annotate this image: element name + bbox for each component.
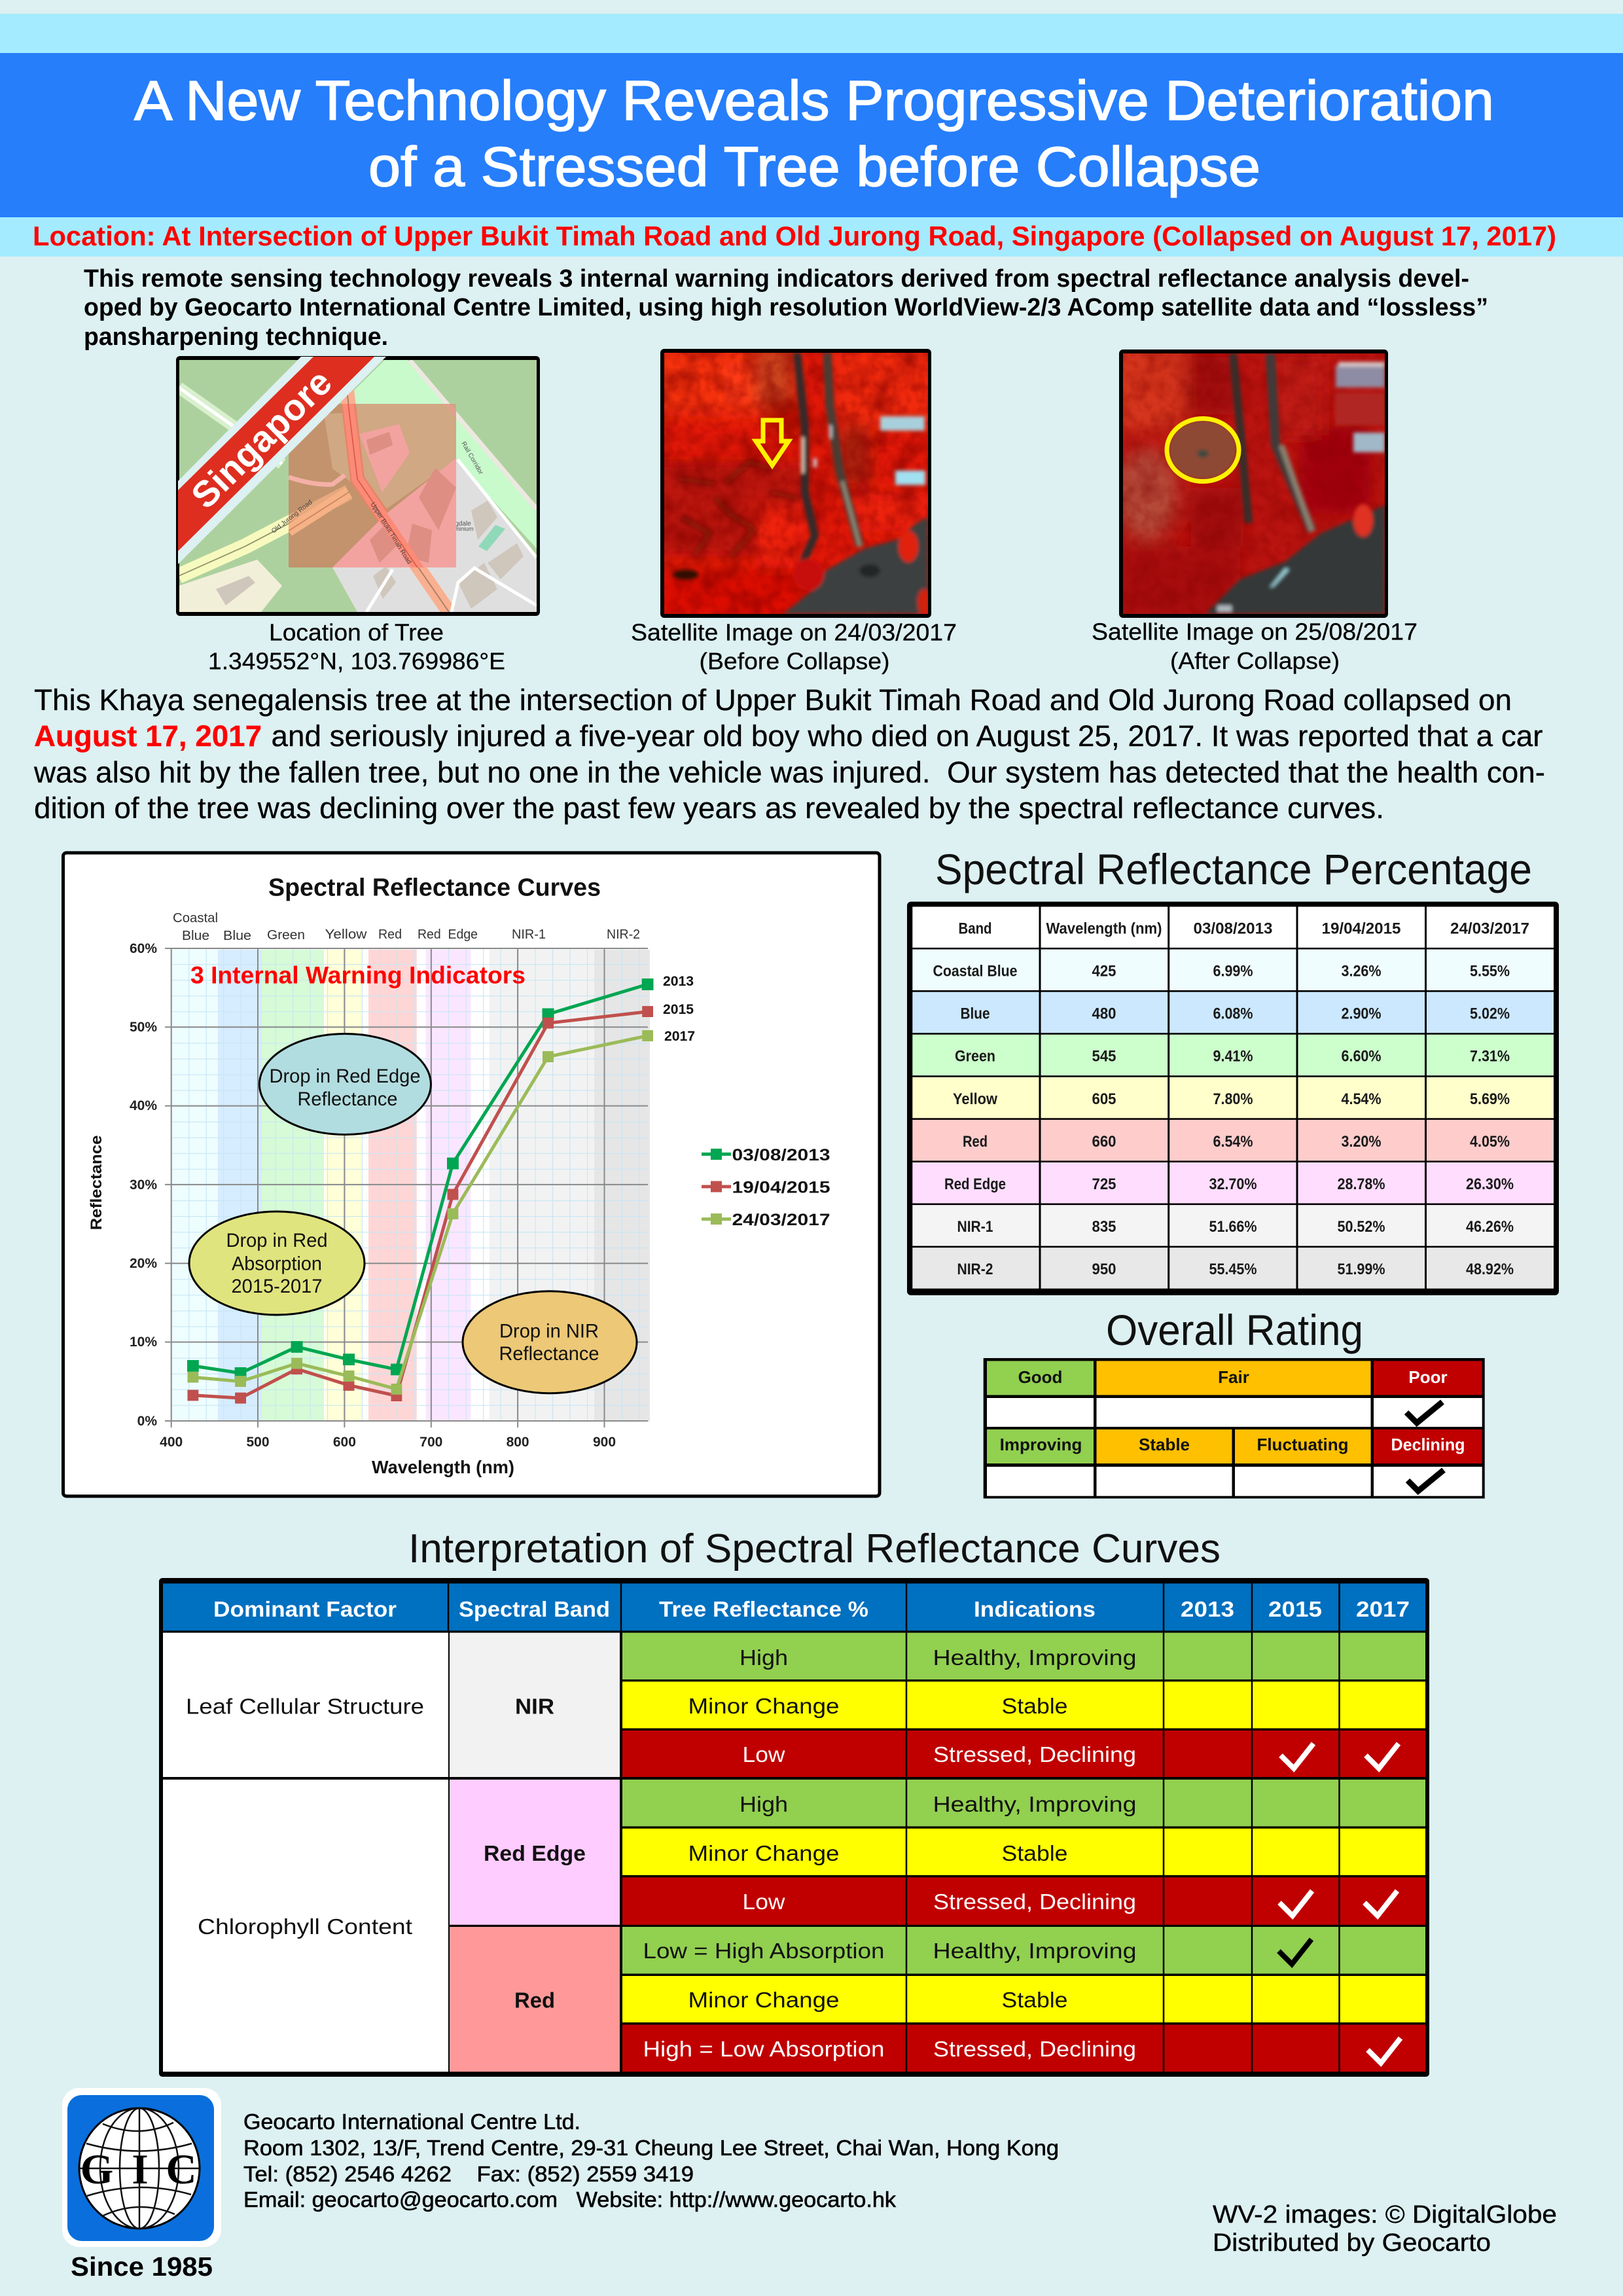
- icon: check declining: [1408, 1470, 1444, 1491]
- callout: red absorption: Drop in Red: [226, 1230, 327, 1251]
- panel: spectral reflectance chart: [63, 853, 880, 1496]
- x axis labels: 500: [246, 1435, 270, 1450]
- table: spectral reflectance percentage: 51.99%: [1338, 1261, 1385, 1278]
- rating rows: Minor Change: [688, 1988, 839, 2012]
- caption before: Satellite Image on 24/03/2017: [631, 619, 957, 645]
- table header row: Dominant Factor: [213, 1597, 397, 1621]
- band labels: Blue: [223, 929, 251, 943]
- band labels: Blue: [182, 929, 209, 943]
- year labels: 2015: [663, 1002, 694, 1017]
- band labels: Green: [267, 928, 305, 942]
- map caption: [208, 619, 505, 674]
- spectral band backgrounds: [171, 950, 650, 1422]
- panel: satellite image before collapse: [654, 347, 933, 620]
- intro text block: pansharpening technique.: [84, 323, 388, 351]
- table: spectral reflectance percentage: 545: [1092, 1048, 1116, 1066]
- table: spectral reflectance percentage: 55.45%: [1209, 1261, 1257, 1278]
- table: spectral reflectance percentage: 7.80%: [1213, 1090, 1253, 1108]
- rating rows: Healthy, Improving: [933, 1939, 1136, 1963]
- legend: 19/04/2015: [732, 1179, 830, 1197]
- y axis labels: [130, 941, 157, 1429]
- x axis title: Wavelength (nm): [372, 1457, 514, 1477]
- table: spectral reflectance percentage: 835: [1092, 1218, 1116, 1236]
- panel: location map: Rail Corridor: [459, 440, 484, 476]
- map caption: 1.349552°N, 103.769986°E: [208, 648, 505, 674]
- rating rows: Stressed, Declining: [933, 2037, 1136, 2061]
- logo: GIC globe: G: [80, 2146, 113, 2193]
- band labels: Red: [378, 927, 402, 942]
- panel: location map: Old Jurong Road: [270, 499, 313, 535]
- panel: location map: Upper Bukit Timah Road: [368, 501, 413, 565]
- table: spectral reflectance percentage: Coastal Blue: [933, 962, 1017, 980]
- contact details: Geocarto International Centre Ltd.: [243, 2109, 580, 2134]
- x axis labels: 800: [507, 1435, 529, 1450]
- table: spectral reflectance percentage: 660: [1092, 1133, 1116, 1151]
- table header row: [163, 1583, 1425, 1631]
- table: spectral reflectance percentage: Red: [963, 1133, 988, 1151]
- x axis labels: 900: [593, 1435, 616, 1450]
- body paragraph: was also hit by the fallen tree, but no one in the vehicle was injured. Our system has detected that the health con-: [33, 755, 1545, 789]
- image credit: [1213, 2201, 1557, 2257]
- panel: location map: Condominium: [437, 526, 474, 532]
- table: spectral reflectance percentage: Blue: [961, 1005, 990, 1023]
- title: [134, 70, 1494, 198]
- contact details: Room 1302, 13/F, Trend Centre, 29-31 Cheung Lee Street, Chai Wan, Hong Kong: [243, 2136, 1059, 2160]
- table: spectral reflectance percentage: 4.05%: [1470, 1133, 1510, 1151]
- table: spectral reflectance percentage: 480: [1092, 1005, 1116, 1023]
- rating rows: Healthy, Improving: [933, 1645, 1136, 1670]
- table: spectral reflectance percentage: 4.54%: [1342, 1090, 1381, 1108]
- dominant factor and band cells: Red: [514, 1988, 555, 2013]
- location line: Location: At Intersection of Upper Bukit Timah Road and Old Jurong Road, Singapore (Collapsed on August 17, 2017): [33, 221, 1556, 251]
- callout: NIR: Reflectance: [499, 1343, 599, 1365]
- table: spectral reflectance percentage: 6.99%: [1213, 962, 1253, 980]
- rating rows: Low: [742, 1890, 785, 1914]
- dominant factor and band cells: Leaf Cellular Structure: [186, 1695, 424, 1719]
- image credit: WV-2 images: © DigitalGlobe: [1213, 2201, 1557, 2229]
- y axis labels: 60%: [130, 941, 157, 956]
- banner: Singapore: Singapore: [183, 361, 340, 516]
- table: overall rating: Stable: [1139, 1435, 1190, 1454]
- table: spectral reflectance percentage: 24/03/2017: [1450, 920, 1529, 937]
- callout: NIR: Drop in NIR: [499, 1321, 599, 1342]
- rating rows: High: [740, 1792, 788, 1816]
- y axis labels: 50%: [130, 1020, 157, 1035]
- table header row: 2017: [1356, 1597, 1410, 1621]
- band labels: NIR-1: [512, 927, 546, 942]
- callout: red edge: Reflectance: [297, 1088, 398, 1110]
- rating rows: High = Low Absorption: [643, 2037, 885, 2061]
- table: spectral reflectance percentage: 2.90%: [1342, 1005, 1381, 1023]
- table: spectral reflectance percentage: 5.55%: [1470, 962, 1510, 980]
- overlay: study area square: [289, 404, 456, 567]
- rating rows: Low: [742, 1742, 785, 1767]
- logo: GIC globe: I: [132, 2146, 149, 2193]
- year labels: [663, 974, 695, 1044]
- table: spectral reflectance percentage: 5.69%: [1470, 1090, 1510, 1108]
- table: overall rating: Poor: [1408, 1367, 1448, 1387]
- table: spectral reflectance percentage: 6.54%: [1213, 1133, 1253, 1151]
- heading: overall rating: Overall Rating: [1106, 1306, 1363, 1354]
- y axis labels: 30%: [130, 1177, 157, 1193]
- x axis labels: [160, 1435, 616, 1450]
- heading: spectral reflectance percentage: Spectral Reflectance Percentage: [935, 845, 1532, 893]
- band labels: NIR-2: [607, 927, 640, 942]
- legend: 03/08/2013: [732, 1146, 830, 1164]
- table: spectral reflectance percentage: 51.66%: [1209, 1218, 1257, 1236]
- dominant factor and band cells: Chlorophyll Content: [198, 1914, 412, 1939]
- table: overall rating: Fluctuating: [1257, 1435, 1349, 1454]
- logo: GIC globe: [62, 2088, 221, 2247]
- y axis labels: 10%: [130, 1335, 157, 1350]
- rating rows: Stressed, Declining: [933, 1890, 1136, 1914]
- table: spectral reflectance percentage: 6.08%: [1213, 1005, 1253, 1023]
- banner: Singapore: [178, 357, 386, 564]
- band labels: Yellow: [325, 927, 367, 942]
- contact details: Tel: (852) 2546 4262 Fax: (852) 2559 3419: [243, 2162, 694, 2186]
- panel: satellite image after collapse: [1113, 347, 1388, 619]
- rating rows: Low = High Absorption: [643, 1939, 885, 1963]
- y axis title: Reflectance: [88, 1135, 105, 1230]
- x axis labels: 400: [160, 1435, 183, 1450]
- table: overall rating: Improving: [1000, 1435, 1082, 1454]
- table: spectral reflectance percentage: 19/04/2015: [1322, 920, 1400, 937]
- body paragraph: This Khaya senegalensis tree at the intersection of Upper Bukit Timah Road and Old Jurong Road collapsed on: [34, 683, 1512, 717]
- table: spectral reflectance percentage: 6.60%: [1342, 1048, 1381, 1066]
- table: overall rating: [984, 1358, 1485, 1499]
- chart title: Spectral Reflectance Curves: [268, 874, 601, 902]
- band labels: Coastal: [173, 911, 218, 925]
- table: spectral reflectance percentage: 425: [1092, 962, 1116, 980]
- series: 2017: [193, 1035, 648, 1389]
- table: spectral reflectance percentage: 03/08/2013: [1194, 920, 1272, 937]
- caption before: [631, 619, 957, 674]
- table header row: 2013: [1181, 1597, 1234, 1621]
- year labels: 2013: [663, 974, 694, 989]
- icon: yellow circle: [1167, 419, 1239, 482]
- panel: location map: Springdale: [440, 520, 471, 528]
- body paragraph: and seriously injured a five-year old boy who died on August 25, 2017. It was reported that a car: [271, 719, 1543, 753]
- series: 2015: [193, 1012, 648, 1398]
- band labels: Red Edge: [418, 927, 478, 942]
- year labels: 2017: [664, 1029, 695, 1044]
- dominant factor and band cells: Red Edge: [484, 1841, 586, 1865]
- table: spectral reflectance percentage: 46.26%: [1466, 1218, 1514, 1236]
- callout: NIR: [463, 1291, 637, 1393]
- table: spectral reflectance percentage: 5.02%: [1470, 1005, 1510, 1023]
- band labels: [173, 911, 640, 943]
- rating rows: Minor Change: [688, 1841, 839, 1865]
- table: spectral reflectance percentage: Yellow: [953, 1090, 997, 1108]
- callout: red edge: Drop in Red Edge: [270, 1066, 420, 1087]
- icon: check poor: [1406, 1402, 1442, 1423]
- caption after: [1092, 618, 1418, 674]
- table header row: Tree Reflectance %: [659, 1597, 868, 1621]
- series: 2013: [193, 984, 648, 1373]
- table: spectral reflectance percentage: 950: [1092, 1261, 1116, 1278]
- table: spectral reflectance percentage: 50.52%: [1338, 1218, 1385, 1236]
- y axis labels: 20%: [130, 1256, 157, 1271]
- intro text block: oped by Geocarto International Centre Limited, using high resolution WorldView-2/3 AComp satellite data and “lossless”: [84, 294, 1488, 321]
- heading: interpretation: Interpretation of Spectral Reflectance Curves: [408, 1526, 1221, 1571]
- table: overall rating: Fair: [1218, 1367, 1249, 1387]
- caption after: (After Collapse): [1170, 647, 1340, 674]
- caption before: (Before Collapse): [699, 648, 890, 674]
- title: of a Stressed Tree before Collapse: [368, 136, 1260, 198]
- legend: [702, 1146, 830, 1229]
- callout: red edge: [259, 1034, 431, 1135]
- table: spectral reflectance percentage: 3.26%: [1342, 962, 1381, 980]
- table: interpretation of curves: [159, 1578, 1429, 2077]
- table: spectral reflectance percentage: Wavelength (nm): [1046, 920, 1162, 937]
- table: spectral reflectance percentage: 605: [1092, 1090, 1116, 1108]
- table: spectral reflectance percentage: NIR-2: [957, 1261, 993, 1278]
- table: overall rating: Declining: [1391, 1435, 1465, 1454]
- chart heading: warning indicators: 3 Internal Warning Indicators: [190, 962, 526, 988]
- rating rows: [622, 1632, 1425, 2072]
- image credit: Distributed by Geocarto: [1213, 2229, 1491, 2257]
- table: spectral reflectance percentage: 3.20%: [1342, 1133, 1381, 1151]
- body paragraph: dition of the tree was declining over the past few years as revealed by the spectral reflectance curves.: [34, 791, 1384, 825]
- intro text block: [84, 265, 1488, 351]
- table: spectral reflectance percentage: [907, 902, 1559, 1295]
- contact details: [243, 2109, 1059, 2212]
- panel: location map: [176, 356, 540, 616]
- rating rows: High: [740, 1645, 788, 1670]
- table: spectral reflectance percentage: 9.41%: [1213, 1048, 1253, 1066]
- rating rows: Stable: [1001, 1694, 1068, 1718]
- title: A New Technology Reveals Progressive Deterioration: [134, 70, 1494, 132]
- table: spectral reflectance percentage: 7.31%: [1470, 1048, 1510, 1066]
- contact details: Email: geocarto@geocarto.com Website: http://www.geocarto.hk: [243, 2187, 897, 2212]
- header band: [0, 14, 1623, 257]
- table: overall rating: Good: [1018, 1367, 1062, 1387]
- intro text block: This remote sensing technology reveals 3 internal warning indicators derived from spectral reflectance analysis devel-: [84, 265, 1469, 293]
- map caption: Location of Tree: [269, 619, 444, 645]
- table: spectral reflectance percentage: 725: [1092, 1175, 1116, 1193]
- table: spectral reflectance percentage: 28.78%: [1338, 1175, 1385, 1193]
- caption after: Satellite Image on 25/08/2017: [1092, 618, 1418, 645]
- dominant factor and band cells: [163, 1633, 620, 2072]
- legend: 24/03/2017: [732, 1211, 830, 1229]
- table: spectral reflectance percentage: 48.92%: [1466, 1261, 1514, 1278]
- table: spectral reflectance percentage: Green: [955, 1048, 995, 1066]
- rating rows: Stable: [1001, 1988, 1068, 2012]
- logo: GIC globe: C: [166, 2146, 196, 2193]
- y axis labels: 0%: [137, 1414, 157, 1429]
- x axis labels: 600: [333, 1435, 356, 1450]
- table header row: Spectral Band: [459, 1597, 610, 1621]
- body paragraph: August 17, 2017: [34, 719, 262, 753]
- rating rows: Stable: [1001, 1841, 1068, 1865]
- dominant factor and band cells: NIR: [515, 1695, 554, 1719]
- callout: red absorption: Absorption: [232, 1253, 322, 1275]
- icons: check marks: [1279, 1744, 1400, 2063]
- y axis labels: 40%: [130, 1098, 157, 1113]
- body paragraph: [33, 683, 1545, 825]
- table: spectral reflectance percentage: 26.30%: [1466, 1175, 1514, 1193]
- rating rows: Minor Change: [688, 1694, 839, 1718]
- rating rows: Healthy, Improving: [933, 1792, 1136, 1816]
- table: spectral reflectance percentage: Band: [958, 920, 992, 937]
- table: spectral reflectance percentage: 32.70%: [1209, 1175, 1257, 1193]
- table header row: Indications: [974, 1597, 1096, 1621]
- label: since 1985: Since 1985: [71, 2251, 213, 2282]
- table header row: 2015: [1268, 1597, 1322, 1621]
- table: spectral reflectance percentage: Red Edge: [944, 1175, 1006, 1193]
- icon: yellow arrow: [756, 420, 789, 465]
- rating rows: Stressed, Declining: [933, 1742, 1136, 1767]
- callout: red absorption: [189, 1211, 365, 1315]
- table: spectral reflectance percentage: NIR-1: [957, 1218, 993, 1236]
- x axis labels: 700: [419, 1435, 442, 1450]
- callout: red absorption: 2015-2017: [232, 1276, 322, 1297]
